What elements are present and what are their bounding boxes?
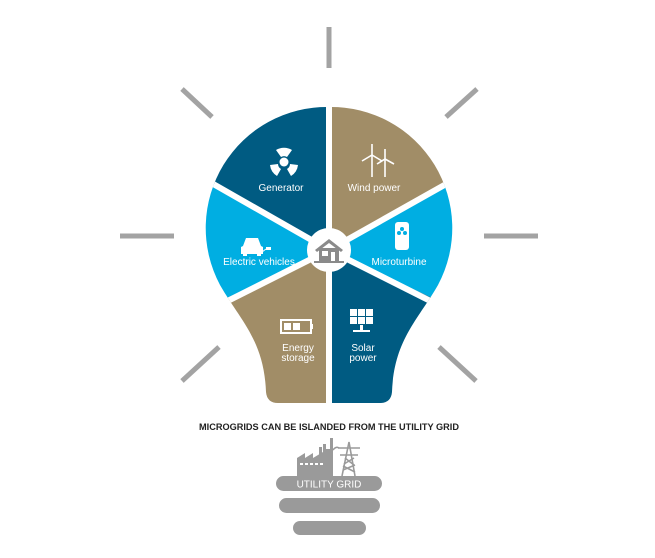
labels: storage — [281, 353, 315, 364]
labels: power — [349, 353, 377, 364]
labels: Generator — [258, 183, 304, 194]
segment: electric vehicles — [206, 184, 309, 298]
segment: solar power — [332, 262, 431, 403]
icon: factory and pylon — [297, 438, 360, 476]
segment: microturbine — [350, 185, 452, 298]
icon: radiation — [270, 148, 298, 176]
center icon: house — [307, 228, 351, 272]
labels: Energy — [282, 343, 314, 354]
icon: car with plug — [241, 238, 271, 256]
bar 3 — [293, 521, 366, 535]
bulb — [206, 107, 452, 403]
labels: Electric vehicles — [223, 257, 295, 268]
rays — [120, 27, 538, 381]
segment: energy storage — [228, 262, 326, 403]
segment: wind power — [332, 107, 444, 237]
icon: solar panel — [350, 309, 373, 332]
segment: generator — [214, 107, 326, 237]
labels: Microturbine — [371, 257, 427, 268]
labels: Solar — [351, 343, 375, 354]
bar: utility grid — [276, 476, 382, 491]
bar 2 — [279, 498, 380, 513]
bar: utility grid: UTILITY GRID — [297, 480, 361, 490]
icon: wind turbines — [362, 144, 394, 177]
labels: Wind power — [348, 183, 401, 194]
icon: microturbine unit — [395, 222, 409, 250]
icon: battery — [281, 320, 313, 333]
labels — [223, 183, 427, 364]
caption: MICROGRIDS CAN BE ISLANDED FROM THE UTILITY GRID — [199, 422, 459, 433]
